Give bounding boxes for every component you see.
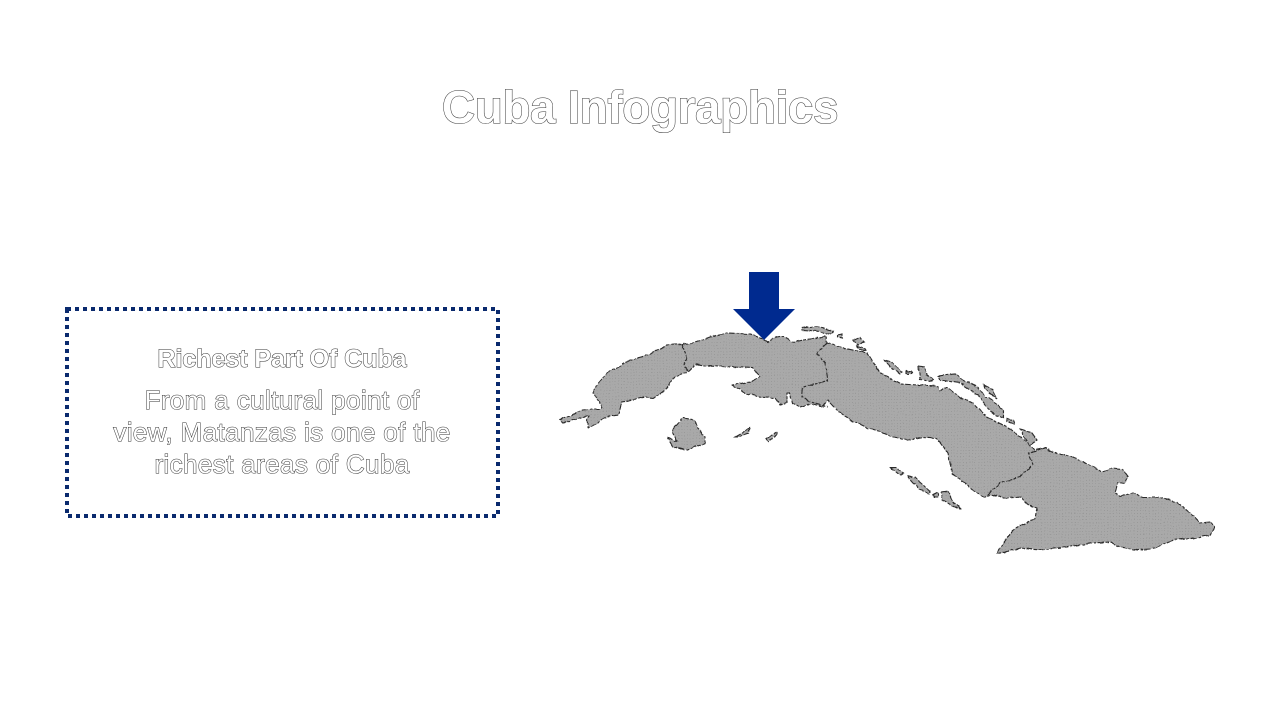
panel body text: From a cultural point of xyxy=(144,385,420,415)
map: province borders xyxy=(682,343,1045,495)
title: Cuba Infographics xyxy=(442,81,838,133)
panel body text: richest areas of Cuba xyxy=(154,449,410,479)
map: all land xyxy=(560,326,1215,553)
arrow pointing at Matanzas xyxy=(733,272,795,340)
dotted panel border xyxy=(65,307,500,518)
panel body text: view, Matanzas is one of the xyxy=(113,417,451,447)
map: northern keys xyxy=(802,326,1037,446)
panel: richest part callout xyxy=(65,307,500,518)
map: main island xyxy=(560,333,1215,553)
panel body text xyxy=(112,385,451,479)
map: Isle of Youth and southern keys xyxy=(667,418,962,510)
panel heading: Richest Part Of Cuba xyxy=(157,345,407,373)
